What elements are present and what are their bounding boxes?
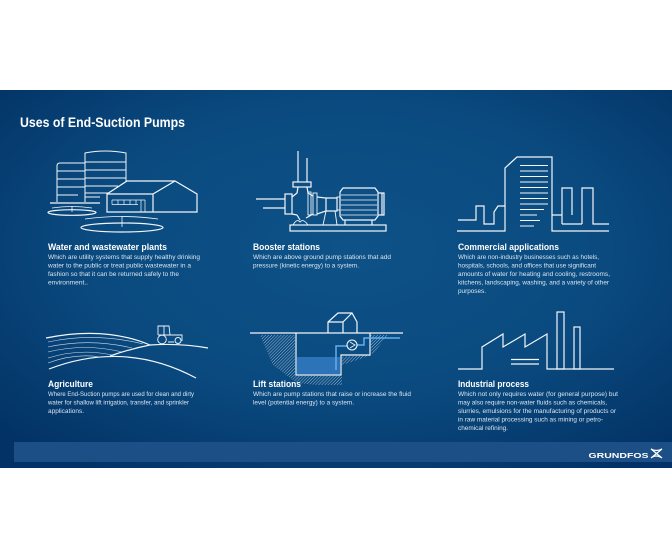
panel: water and wastewater plants [47,151,200,286]
panel: agriculture [46,326,208,415]
title: Uses of End-Suction Pumps [20,115,185,130]
text block: water for shallow lift irrigation, transfer, and sprinkler [47,400,190,406]
panel: commercial applications [457,157,610,295]
panel: industrial process [458,312,618,432]
logo: Grundfos: GRUNDFOS [588,451,648,460]
text block: water to the public or treat public wastewater in a [47,262,191,270]
text block: level (potential energy) to a system. [253,400,354,406]
text block [253,254,391,270]
text block: Which are non-industry businesses such as hotels, [458,254,599,261]
icon: lift station [250,313,403,385]
logo: Grundfos [588,449,662,460]
background panel [0,90,672,468]
icon: field and tractor [46,326,208,378]
text block: environment.. [48,280,88,286]
text block [458,391,618,432]
heading: Booster stations [253,242,320,252]
heading: Lift stations [253,379,301,389]
icon: water plant [48,151,197,232]
heading: Agriculture [48,379,93,389]
text block: fashion so that it can be returned safely to the [48,271,179,278]
text block: amounts of water for heating and cooling, restrooms, [458,271,610,278]
text block: Where End-Suction pumps are used for clean and dirty [48,391,195,398]
text block: purposes. [458,288,486,295]
text block: applications. [48,408,84,415]
heading: Commercial applications [458,242,559,252]
text block: slurries, emulsions for the manufacturing of products or [458,408,617,415]
footer band [14,442,672,462]
icon: commercial buildings [457,157,609,231]
text block: may also require non-water fluids such as chemicals, [458,400,607,406]
text block [47,391,195,415]
text block [458,254,610,295]
text block: in raw material processing such as mining or petro- [458,416,603,424]
icon: factory [458,312,614,369]
panel: booster stations [253,151,391,270]
text block: pressure (kinetic energy) to a system. [253,262,359,270]
text block [253,391,411,406]
text block: Which are pump stations that raise or increase the fluid [253,391,411,398]
text block: Which not only requires water (for general purpose) but [458,391,618,398]
heading: Industrial process [458,379,529,389]
text block: kitchens, landscaping, washing, and a variety of other [458,280,610,286]
heading: Water and wastewater plants [48,242,167,252]
text block: Which are above ground pump stations that add [253,254,391,261]
text block: chemical refining. [458,425,508,432]
icon: end-suction pump [256,151,386,231]
text block: Which are utility systems that supply healthy drinking [48,254,200,261]
text block: hospitals, schools, and offices that use significant [458,262,596,270]
panel: lift stations [250,313,411,406]
text block [47,254,200,286]
